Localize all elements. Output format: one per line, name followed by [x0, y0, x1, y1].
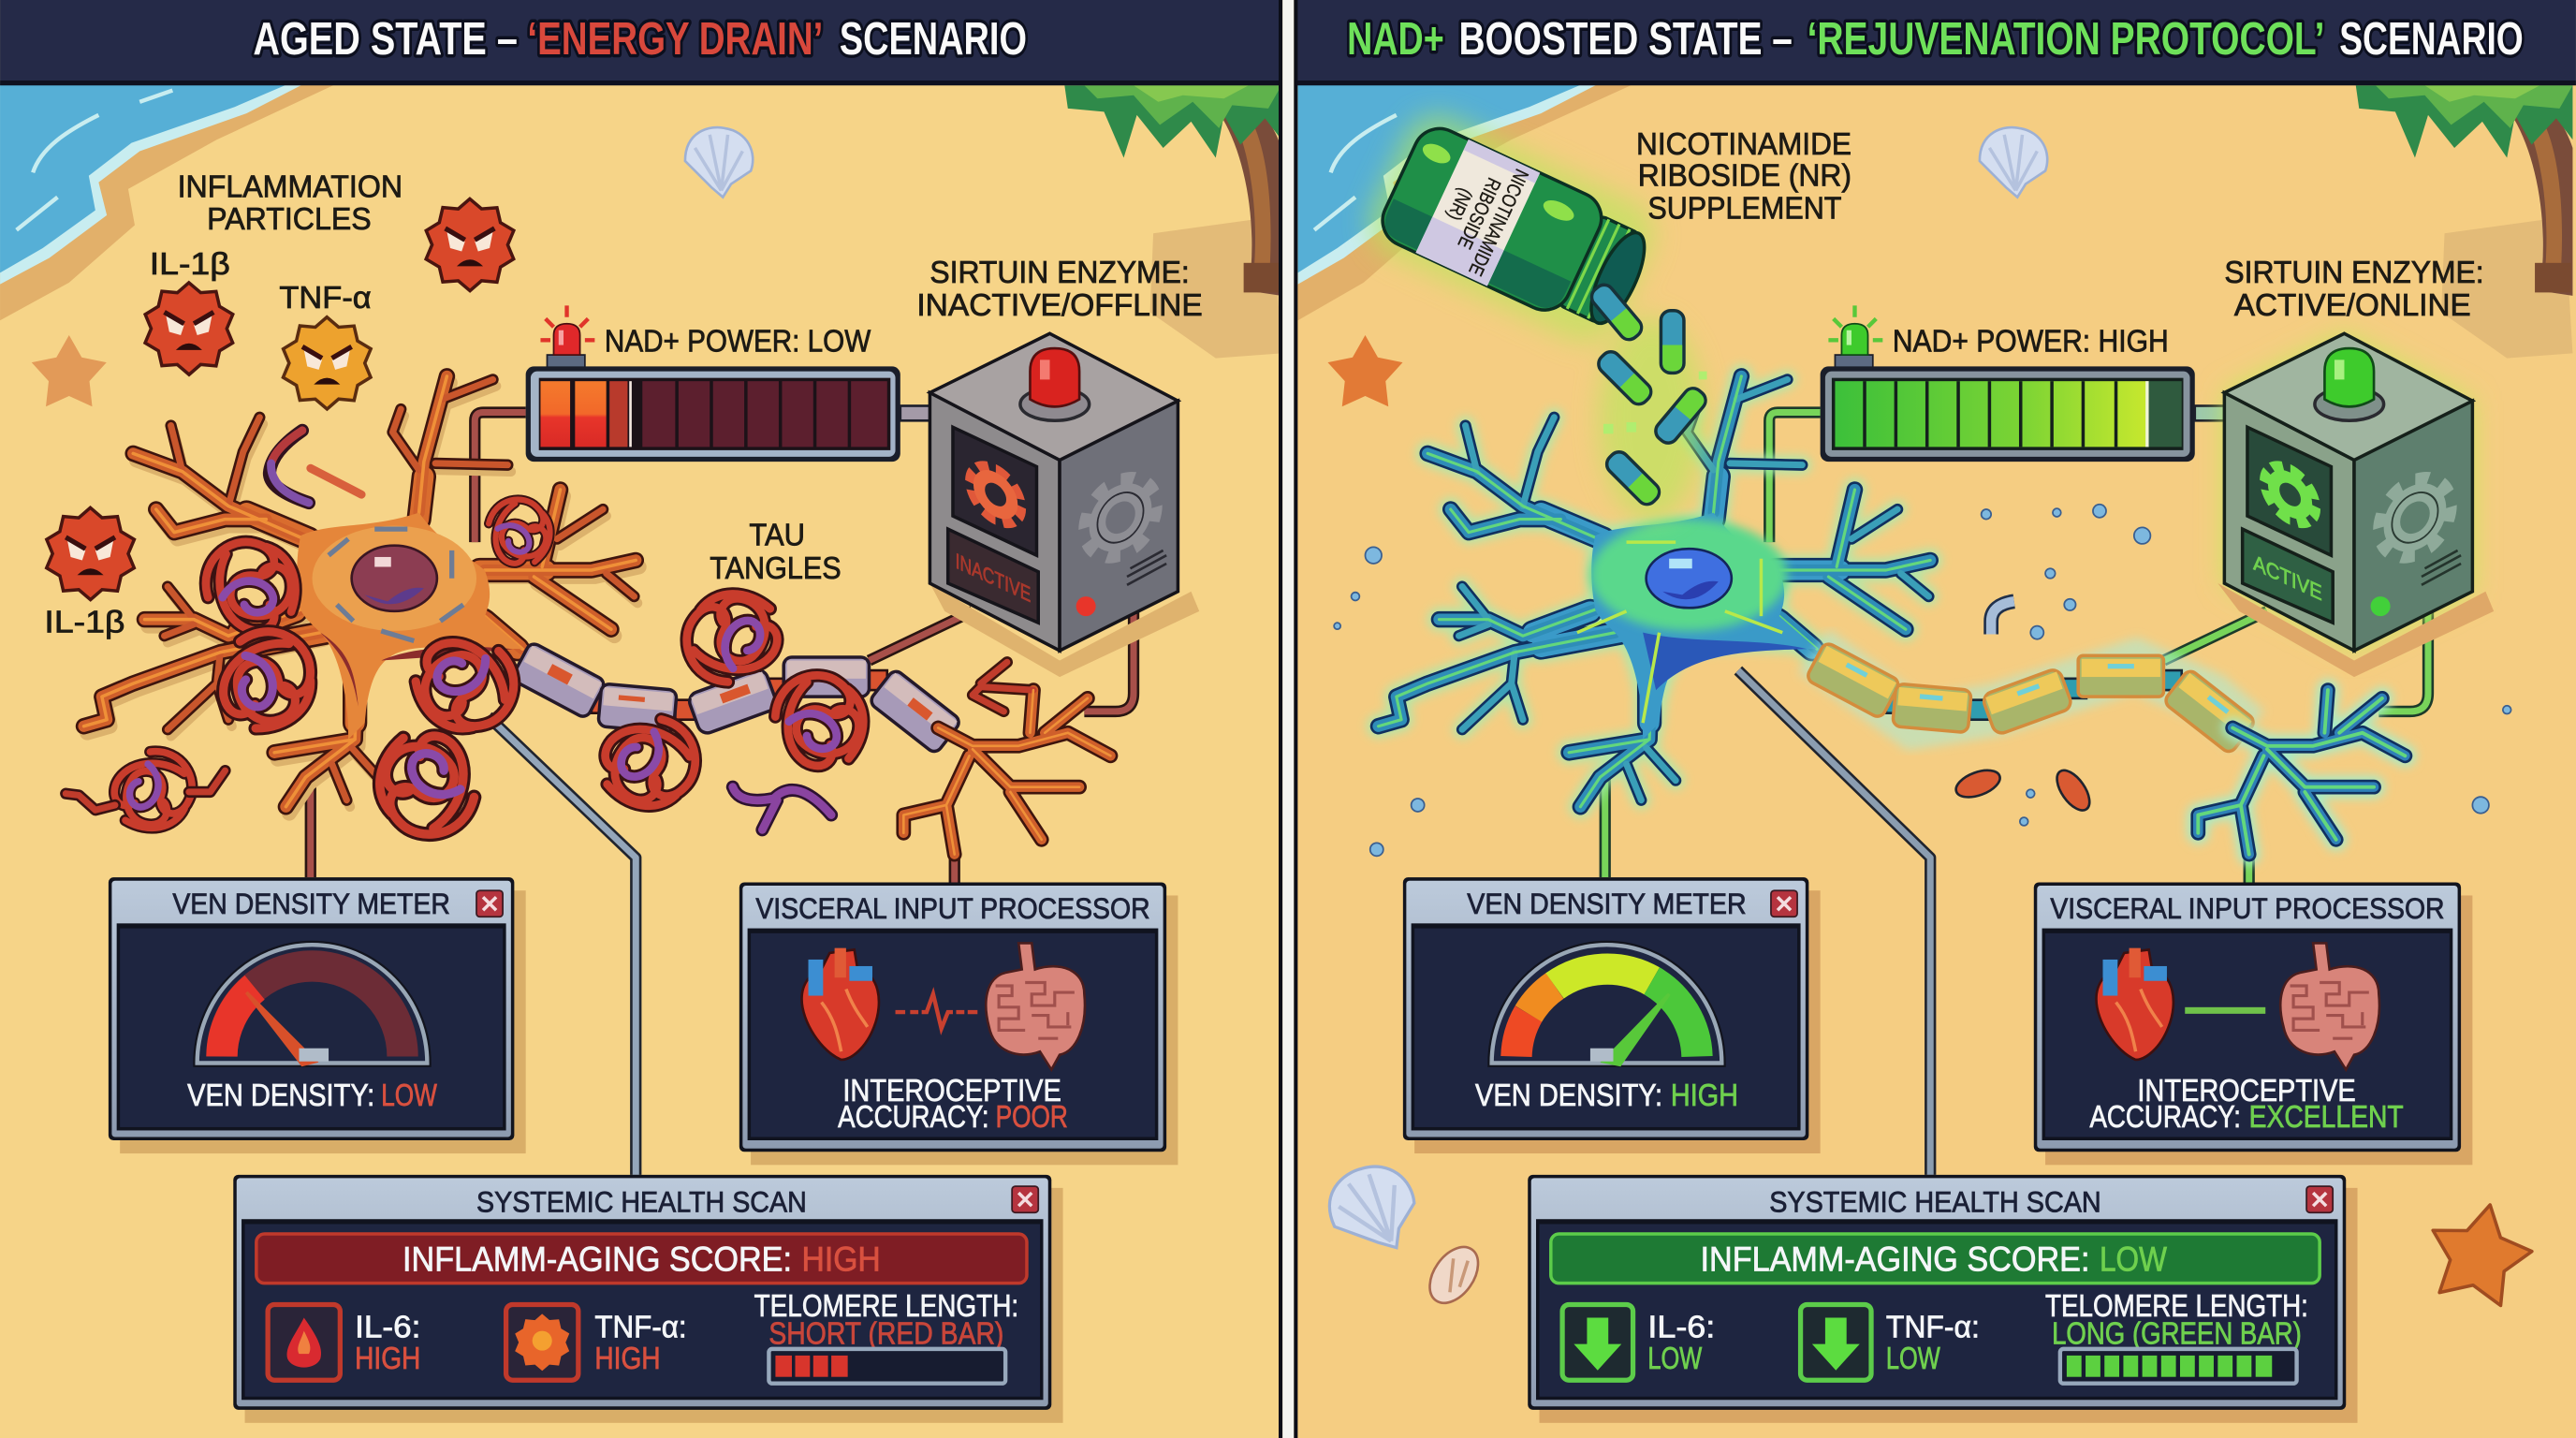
bottle label text: (NR) [1442, 184, 1476, 224]
sand beads [1334, 505, 2511, 856]
organelles [329, 529, 463, 640]
label: inflammation particles: PARTICLES [207, 202, 372, 237]
close button [1771, 890, 1797, 917]
header: aged state: ‘ENERGY DRAIN’ [527, 14, 823, 65]
panel: systemic health scan [233, 1175, 1063, 1423]
panel: VEN density meter [109, 877, 526, 1153]
indicator dot [1076, 596, 1096, 616]
label: NAD+ power high: NAD+ POWER: HIGH [1893, 325, 2169, 360]
nucleus [352, 546, 437, 611]
inflammation particle: IL-1 beta [132, 272, 246, 385]
inflamm-aging score bar: INFLAMM-AGING SCORE: [1701, 1240, 2089, 1279]
panel title: VISCERAL INPUT PROCESSOR [755, 891, 1150, 925]
header: aged state: AGED STATE – [253, 14, 518, 65]
icon: pink shell [1420, 1239, 1488, 1312]
label: sirtuin enzyme: SIRTUIN ENZYME: [2224, 256, 2484, 290]
telomere length: TELOMERE LENGTH: [754, 1289, 1018, 1324]
beach water with wet sand [0, 82, 340, 320]
bottle label text: NICOTINAMIDE [1464, 166, 1532, 279]
tau tangles [66, 489, 876, 851]
panel title: SYSTEMIC HEALTH SCAN [1769, 1184, 2101, 1218]
bottle label text: RIBOSIDE [1453, 174, 1504, 252]
header: NAD+ boosted state [1295, 0, 2576, 85]
screen with gear [953, 427, 1036, 555]
reading: ACCURACY: [838, 1100, 989, 1135]
dome light [1020, 348, 1090, 420]
TNF reading: LOW [1886, 1342, 1940, 1376]
TNF reading [1886, 1311, 1980, 1376]
loose tangle tails [66, 770, 225, 810]
TNF reading: TNF-α: [1886, 1311, 1980, 1345]
icon: starfish [32, 335, 107, 406]
IL-6 reading [1647, 1311, 1715, 1376]
neuron terminal branches [903, 662, 1110, 855]
connector: battery to enzyme [900, 405, 931, 420]
screen with gear [2247, 427, 2331, 555]
panel: VEN density meter [1403, 877, 1821, 1153]
panel title: SYSTEMIC HEALTH SCAN [476, 1184, 807, 1218]
wires: connectors [311, 413, 1134, 1175]
close button [1012, 1186, 1038, 1212]
inflamm-aging score bar: HIGH [802, 1240, 881, 1279]
label: tau tangles: TAU [749, 519, 805, 553]
lower shade [1643, 633, 1808, 690]
reading: INTEROCEPTIVE [842, 1074, 1061, 1108]
label: nicotinamide riboside supplement: SUPPLEMENT [1647, 191, 1841, 226]
telomere length: LONG (GREEN BAR) [2052, 1317, 2302, 1352]
icon: TNF burst [506, 1304, 578, 1380]
label: sirtuin enzyme [2224, 256, 2484, 323]
header: aged state [0, 0, 1280, 85]
icon: TNF down arrow [1801, 1304, 1871, 1380]
reading: HIGH [1671, 1078, 1738, 1113]
icon: IL-6 flame [268, 1304, 340, 1380]
background: right panel sand [1295, 0, 2576, 1438]
signal: strong connection [2185, 1007, 2265, 1014]
gauge: high [1492, 945, 1721, 1064]
inflamm-aging score bar: INFLAMM-AGING SCORE: [402, 1240, 792, 1279]
inflammation particle: lower [33, 498, 148, 609]
telomere length [754, 1289, 1018, 1384]
status label: active: ACTIVE [2253, 550, 2322, 606]
label: sirtuin enzyme: SIRTUIN ENZYME: [929, 256, 1190, 290]
reading: EXCELLENT [2249, 1100, 2404, 1135]
beach water with wet sand [1298, 82, 1638, 320]
inflamm-aging score bar: LOW [2100, 1240, 2167, 1279]
label: sirtuin enzyme [916, 256, 1203, 323]
palm tree [1064, 85, 1281, 359]
TNF reading: HIGH [594, 1342, 661, 1376]
palm tree [2356, 85, 2572, 359]
alarm light: green [1828, 305, 1882, 368]
IL-6 reading: IL-6: [1647, 1311, 1715, 1345]
soma inner glow [313, 526, 476, 631]
label: TNF-alpha: TNF-α [279, 281, 372, 315]
sirtuin enzyme box: online [2217, 333, 2494, 677]
bottle opening [1581, 226, 1655, 330]
gear side [2380, 471, 2450, 565]
reading: ACCURACY: [2089, 1100, 2241, 1135]
IL-6 reading: IL-6: [355, 1311, 420, 1345]
bottle label text [1426, 148, 1532, 279]
label: IL-1 beta lower: IL-1β [44, 606, 124, 640]
lower shade [320, 633, 513, 707]
header: NAD+ boosted state: NAD+ [1347, 14, 1444, 65]
axon nodes [1886, 670, 2182, 720]
inflamm-aging score bar [1551, 1234, 2320, 1284]
label: nicotinamide riboside supplement: NICOTINAMIDE [1636, 127, 1852, 162]
reading [838, 1074, 1068, 1135]
icon: intestines [986, 943, 1085, 1070]
center divider [1279, 0, 1297, 1438]
header: NAD+ boosted state: BOOSTED STATE – [1459, 14, 1793, 65]
neuron: rejuvenated, blue-green [1379, 376, 1930, 807]
supplement glow [1356, 103, 1704, 521]
telomere length [2045, 1289, 2308, 1384]
inflamm-aging score bar [256, 1234, 1027, 1284]
status label: inactive [948, 529, 1038, 623]
gauge: low [198, 945, 427, 1064]
header: NAD+ boosted state: SCENARIO [2339, 14, 2524, 65]
capsules falling [1588, 281, 1709, 508]
header: NAD+ boosted state: ‘REJUVENATION PROTOCOL’ [1808, 14, 2324, 65]
icon: starfish [1327, 335, 1403, 406]
icon: heart [2096, 948, 2174, 1060]
highlights [1420, 139, 1454, 168]
label: tau tangles: TANGLES [710, 551, 842, 586]
axon: damaged myelin segments [511, 641, 962, 755]
IL-6 reading [355, 1311, 420, 1376]
label: tau tangles [710, 519, 842, 586]
label: sirtuin enzyme: ACTIVE/ONLINE [2234, 288, 2471, 323]
panel: systemic health scan [1528, 1175, 2358, 1423]
panel: visceral input processor [2034, 882, 2472, 1165]
debris: orange fragments [1953, 765, 2096, 815]
panel title: VISCERAL INPUT PROCESSOR [2050, 891, 2445, 925]
panel title: VEN DENSITY METER [1467, 887, 1747, 920]
panel: aged state [0, 82, 1281, 1423]
status label: inactive: INACTIVE [956, 549, 1031, 608]
connector: battery to enzyme [2195, 405, 2226, 420]
icon: heart [802, 948, 879, 1060]
vent lines [2422, 550, 2461, 585]
bottle label [1415, 139, 1540, 286]
close button [2306, 1186, 2333, 1212]
debris: cleared tangle [1991, 601, 2014, 634]
panel: NAD+ boosted state [1298, 82, 2572, 1423]
battery gauge: NAD+ low [526, 366, 900, 462]
reading: POOR [996, 1100, 1068, 1135]
telomere length: SHORT (RED BAR) [768, 1317, 1003, 1352]
reading: LOW [381, 1078, 437, 1113]
reading: INTEROCEPTIVE [2137, 1074, 2356, 1108]
icon: large starfish [2421, 1195, 2539, 1310]
reading: VEN DENSITY: [187, 1078, 374, 1113]
soma inner glow [1590, 520, 1788, 631]
close button [476, 890, 503, 917]
label: inflammation particles: INFLAMMATION [178, 170, 402, 205]
inflammation particle [413, 189, 527, 301]
panel: visceral input processor [739, 882, 1178, 1165]
nucleus [1647, 549, 1732, 608]
inflammation particle: TNF-alpha [270, 307, 384, 418]
bottle: nicotinamide riboside [1374, 120, 1661, 343]
label: nicotinamide riboside supplement [1636, 127, 1852, 226]
IL-6 reading: HIGH [355, 1342, 420, 1376]
loose tau worm: lower [733, 787, 831, 829]
label: sirtuin enzyme: INACTIVE/OFFLINE [916, 288, 1203, 323]
gear side [1086, 471, 1155, 565]
reading: VEN DENSITY: [1475, 1078, 1662, 1113]
icon: IL-6 down arrow [1562, 1304, 1633, 1380]
neuron: aged, orange [84, 376, 639, 814]
icon: intestines [2280, 943, 2379, 1070]
sirtuin enzyme box: offline [929, 333, 1199, 677]
loose tau worm: upper [270, 431, 361, 503]
energy streaks [1577, 542, 1782, 723]
vent lines [1127, 550, 1166, 585]
icon: large seashell [1317, 1152, 1430, 1268]
icon: seashell [685, 127, 753, 198]
IL-6 reading: LOW [1647, 1342, 1703, 1376]
battery gauge: NAD+ high [1821, 366, 2195, 462]
TNF reading [594, 1311, 687, 1376]
debris: broken tangle outline [1991, 601, 2014, 634]
panel title: VEN DENSITY METER [172, 887, 450, 920]
alarm light: red [540, 305, 594, 368]
label: inflammation particles [178, 170, 402, 237]
header: aged state: SCENARIO [840, 14, 1027, 65]
label: IL-1 beta: IL-1β [150, 247, 230, 282]
TNF reading: TNF-α: [594, 1311, 687, 1345]
wires: connectors [1605, 413, 2428, 1175]
signal: weak pulse [896, 994, 977, 1029]
status label: active [2243, 529, 2333, 623]
axon: healthy myelin segments [1806, 641, 2257, 755]
neuron terminal branches [2198, 690, 2405, 855]
indicator dot [2371, 596, 2391, 616]
telomere length: TELOMERE LENGTH: [2045, 1289, 2308, 1324]
label: NAD+ power low: NAD+ POWER: LOW [605, 325, 871, 360]
icon: seashell [1980, 127, 2047, 198]
axon nodes [592, 670, 887, 720]
label: nicotinamide riboside supplement: RIBOSIDE (NR) [1638, 158, 1852, 193]
dome light [2315, 348, 2384, 420]
reading [2089, 1074, 2404, 1135]
